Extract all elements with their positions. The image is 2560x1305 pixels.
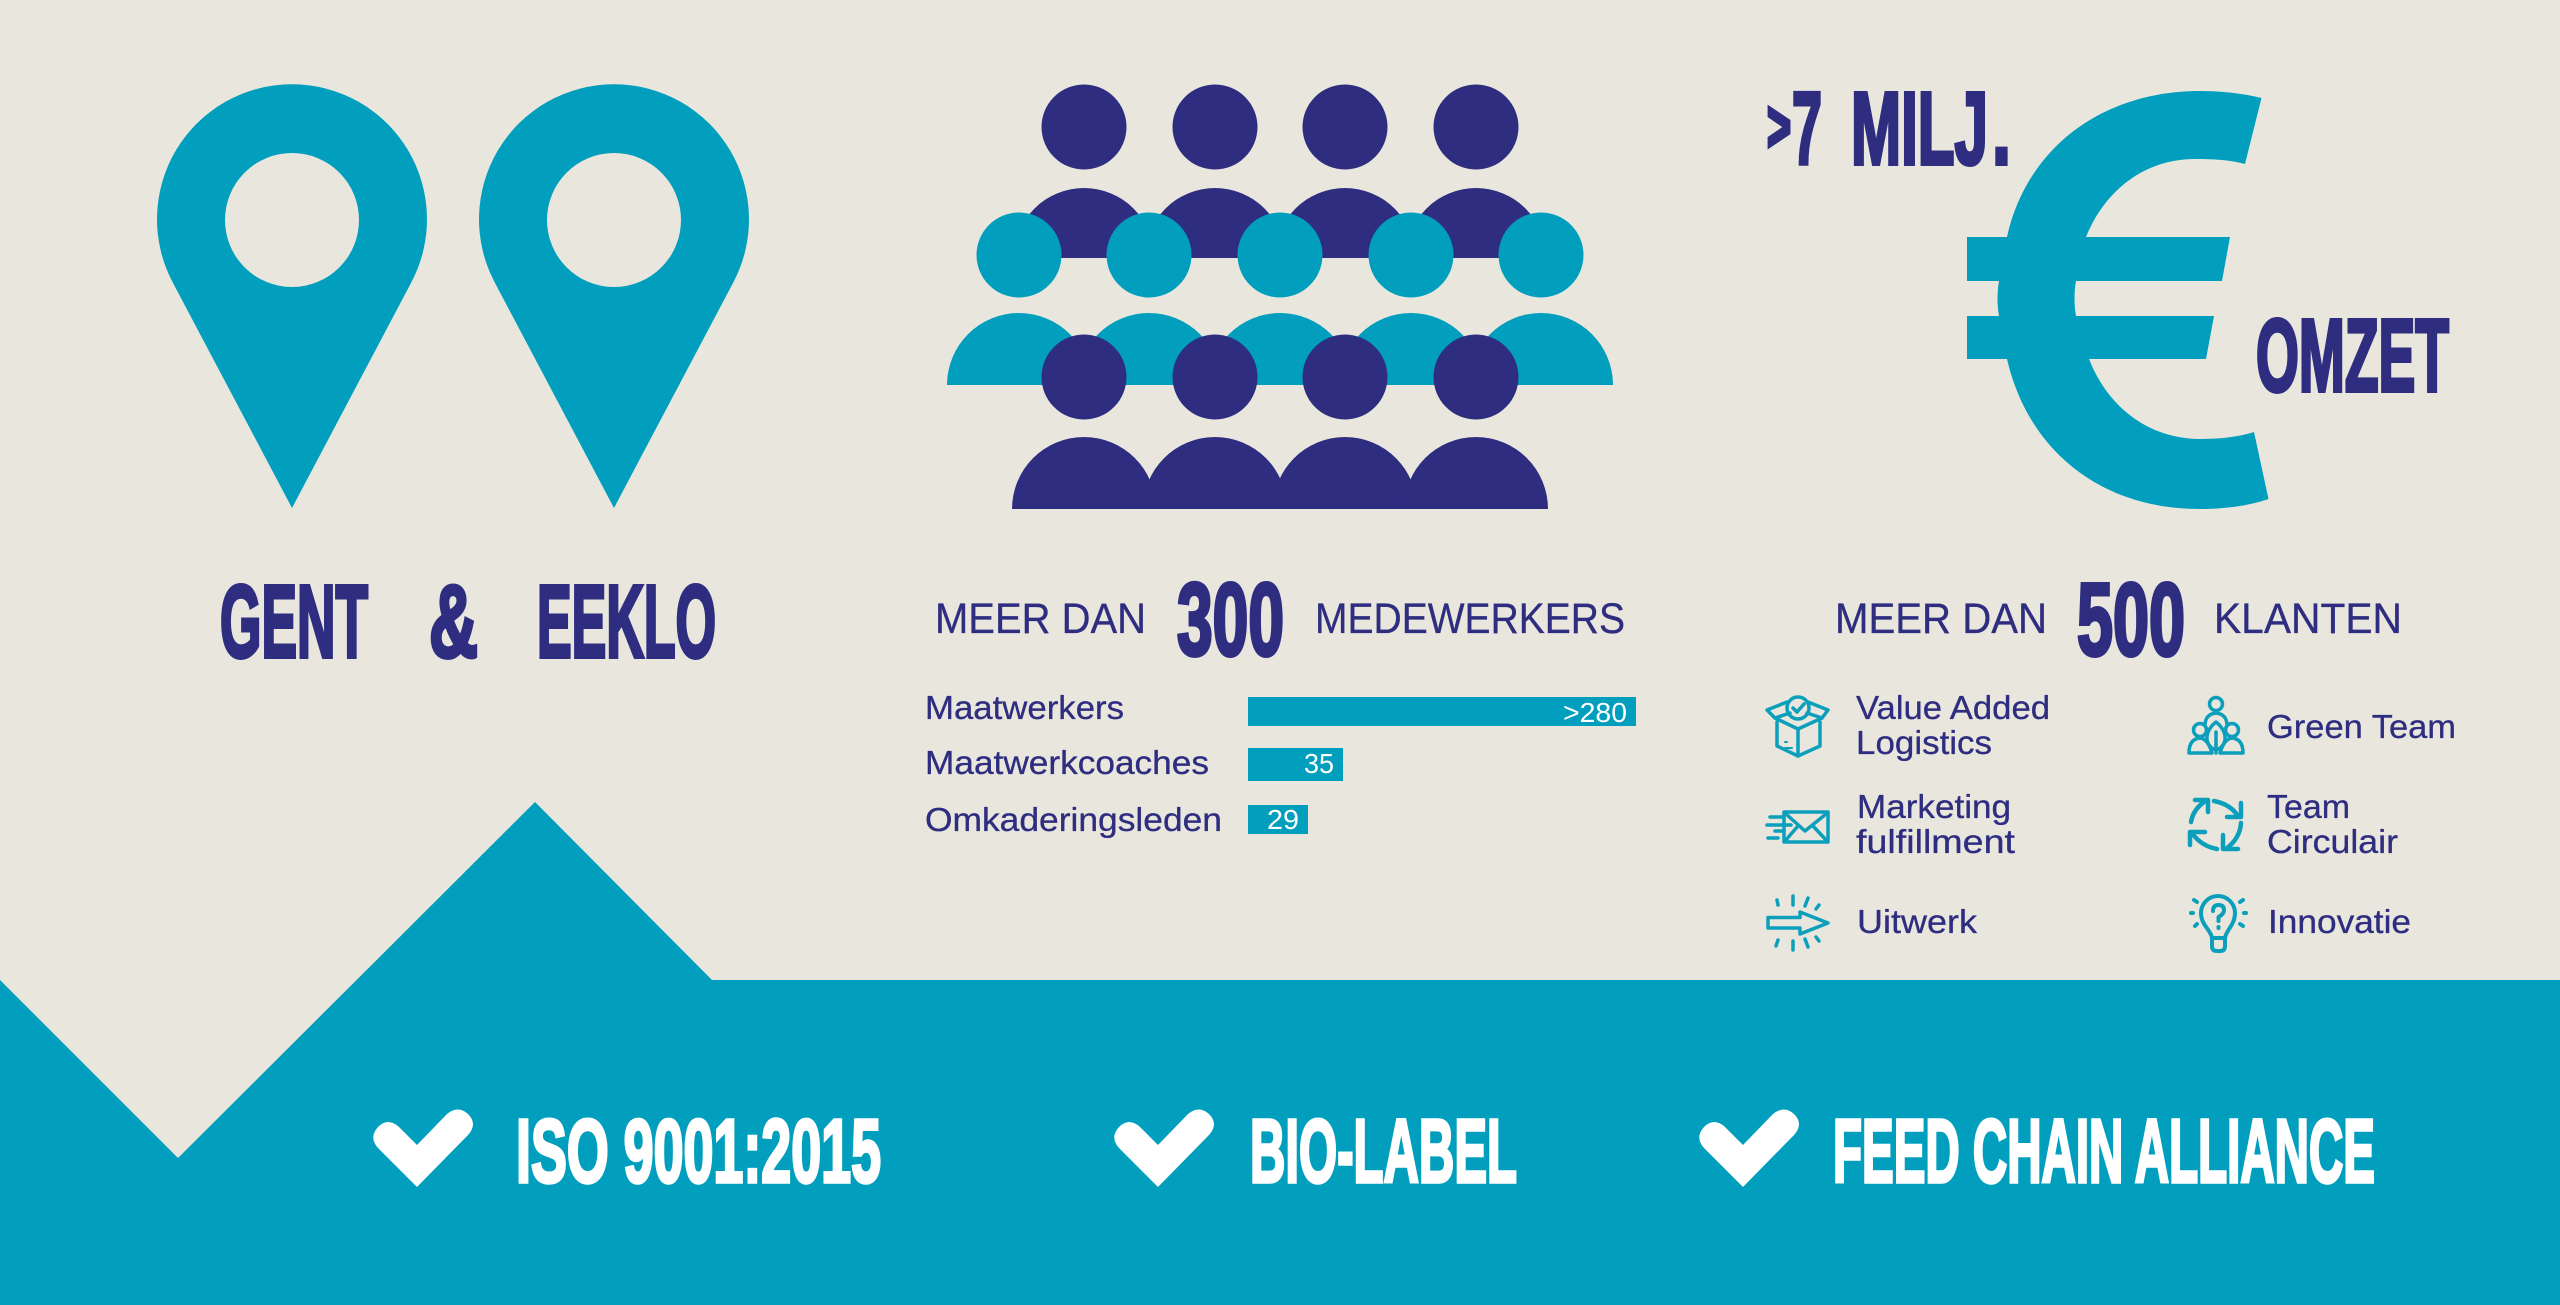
icon: euro sign [1967, 91, 2268, 509]
label: Team [2267, 788, 2350, 825]
bar row: Maatwerkers [925, 689, 1636, 728]
certification: Bio-label [1114, 1102, 1517, 1202]
label: BIO-LABEL: BIO-LABEL [1250, 1102, 1517, 1202]
heading: meer dan 500 klanten: MEER DAN [1835, 595, 2047, 643]
service: Innovatie [2191, 896, 2411, 951]
bar row: Maatwerkers: Maatwerkers [925, 689, 1124, 726]
panel: bottom band with certifications [0, 802, 2560, 1305]
panel: employees [925, 84, 1636, 838]
text: >7 MILJ.: 7 [1792, 71, 1822, 186]
certification: Feed Chain Alliance [1699, 1102, 2375, 1202]
icon: map pin Gent [157, 84, 427, 508]
heading: meer dan 300 medewerkers: 300 [1177, 562, 1284, 677]
bar row: Omkaderingsleden: 29 [1267, 804, 1299, 835]
heading: GENT & EEKLO: & [429, 564, 478, 679]
icon: check mark [1699, 1110, 1799, 1187]
label line 2: fulfillment [1856, 823, 2015, 860]
icon: team with leaf [2189, 698, 2243, 753]
heading: meer dan 300 medewerkers: MEDEWERKERS [1315, 595, 1625, 643]
heading: GENT & EEKLO: GENT [220, 564, 368, 679]
text: >7 MILJ.: > [1767, 87, 1791, 167]
icon: circular arrows [2190, 800, 2241, 849]
label line 2: Logistics [1856, 724, 1992, 761]
heading: meer dan 500 klanten [1835, 562, 2402, 677]
text: >7 MILJ.: MILJ [1851, 71, 1988, 186]
panel: locations [157, 84, 749, 679]
service: Marketing fulfillment [1767, 788, 2015, 860]
label: Value Added [1856, 689, 2050, 726]
teal band with triangle notch [0, 802, 2560, 1305]
icon: check mark [373, 1110, 473, 1187]
icon: envelope with speed lines [1767, 812, 1828, 842]
icon: map pin Eeklo [479, 84, 749, 508]
bar row: Omkaderingsleden: Omkaderingsleden [925, 801, 1222, 838]
text: >7 MILJ. [1767, 71, 2011, 186]
label: Uitwerk [1857, 903, 1978, 940]
bar chart: employee groups [925, 689, 1636, 838]
panel: revenue [1767, 71, 2449, 509]
panel: customers and services [1767, 562, 2456, 951]
bar row: Maatwerkcoaches [925, 744, 1343, 781]
label: Innovatie [2268, 903, 2411, 940]
heading: GENT & EEKLO [220, 564, 716, 679]
heading: meer dan 500 klanten: KLANTEN [2214, 595, 2402, 643]
label line 2: Circulair [2267, 823, 2398, 860]
heading: GENT & EEKLO: EEKLO [537, 564, 716, 679]
icon: arrow with rays [1768, 896, 1828, 950]
service: Value Added Logistics [1767, 689, 2050, 761]
heading: meer dan 500 klanten: 500 [2077, 562, 2185, 677]
label: Green Team [2267, 708, 2456, 745]
icon: open box [1767, 697, 1828, 756]
certification: ISO 9001:2015 [373, 1102, 881, 1202]
icon: light bulb with question mark [2191, 896, 2246, 951]
bar row: Maatwerkers: >280 [1563, 697, 1627, 728]
label: ISO 9001:2015: ISO 9001:2015 [516, 1102, 881, 1202]
icon: crowd of people [947, 84, 1613, 509]
service: Uitwerk [1768, 896, 1978, 950]
text: >7 MILJ.: . [1992, 71, 2011, 186]
bar row: Maatwerkcoaches: 35 [1304, 748, 1334, 779]
label: Marketing [1857, 788, 2011, 825]
service: Green Team [2189, 698, 2456, 753]
bar row: Maatwerkcoaches: Maatwerkcoaches [925, 744, 1209, 781]
service: Team Circulair [2190, 788, 2398, 860]
heading: meer dan 300 medewerkers: MEER DAN [935, 595, 1146, 643]
heading: meer dan 300 medewerkers [935, 562, 1625, 677]
icon: check mark [1114, 1110, 1214, 1187]
